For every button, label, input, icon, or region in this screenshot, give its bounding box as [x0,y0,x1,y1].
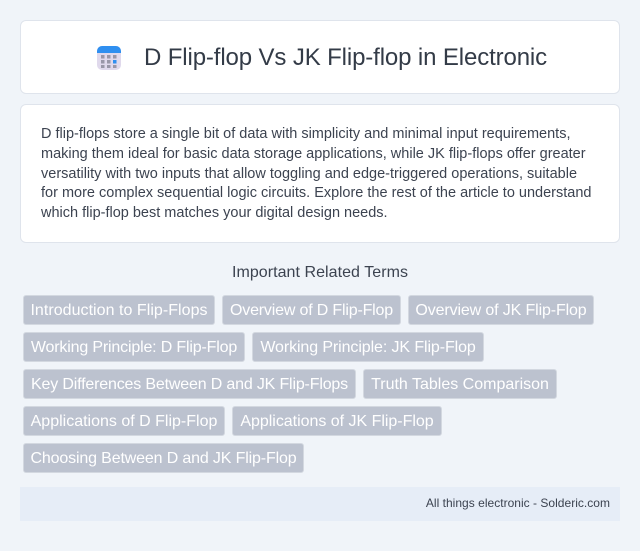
tag: Key Differences Between D and JK Flip-Flops [31,376,348,393]
tag: Applications of JK Flip-Flop [240,413,434,430]
tag [232,406,442,436]
footer credit: All things electronic - Solderic.com [426,496,610,510]
title: D Flip-flop Vs JK Flip-flop in Electronic [144,44,547,71]
tag: Working Principle: D Flip-Flop [31,339,237,356]
text block: introduction: making them ideal for basic data storage applications, while JK flip-flops offer greater [41,146,586,162]
tag [23,369,356,399]
text block: introduction: versatility with two inputs that allow toggling and edge-triggered operations, suitable [41,166,577,182]
text block: introduction: which flip-flop best matches your digital design needs. [41,205,388,221]
text block: introduction [41,126,591,221]
text block: introduction: D flip-flops store a single bit of data with simplicity and minimal input requirements, [41,126,570,142]
tag: Overview of D Flip-Flop [230,302,393,319]
heading: important related terms: Important Related Terms [232,264,408,281]
tag: Working Principle: JK Flip-Flop [260,339,476,356]
tag: Choosing Between D and JK Flip-Flop [30,450,296,467]
tag [252,332,484,362]
tag [408,295,594,325]
tag [363,369,557,399]
icon: calendar [97,46,121,70]
tag [23,295,215,325]
tag [222,295,401,325]
tag: Introduction to Flip-Flops [30,302,208,319]
tag: Truth Tables Comparison [371,376,549,393]
text block: introduction: for more complex sequential logic circuits. Explore the rest of the article to understand [41,185,591,201]
tag [23,332,245,362]
panel: introduction [20,104,620,243]
tag [23,443,304,473]
tag: Applications of D Flip-Flop [31,413,217,430]
footer bar [20,487,620,521]
tag [23,406,225,436]
panel: header [20,20,620,94]
tag list [23,295,594,473]
tag: Overview of JK Flip-Flop [415,302,587,319]
